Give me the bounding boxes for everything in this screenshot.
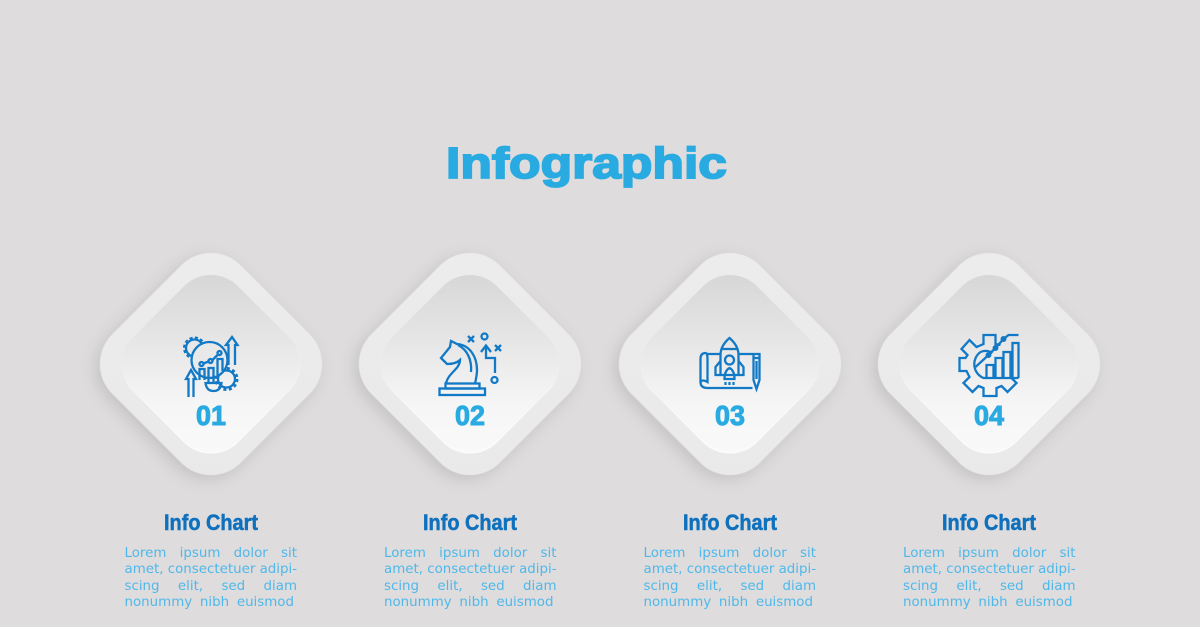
text block: Lorem ipsum dolor sit bbox=[384, 546, 556, 561]
panel: step 02 bbox=[352, 253, 581, 610]
outer diamond bbox=[861, 236, 1117, 492]
title: Infographic bbox=[446, 139, 727, 188]
heading: Info Chart bbox=[682, 510, 777, 535]
text block bbox=[124, 546, 297, 610]
text block: Lorem ipsum dolor sit bbox=[124, 546, 297, 561]
heading: Info Chart bbox=[164, 510, 258, 535]
text block: scing elit, sed diam bbox=[903, 579, 1076, 594]
panel: step 03 bbox=[612, 253, 841, 610]
icon: chess knight strategy bbox=[440, 334, 501, 395]
text block: amet, consectetuer adipi- bbox=[903, 562, 1076, 577]
icon: rocket blueprint bbox=[700, 338, 759, 389]
outer diamond bbox=[342, 236, 598, 492]
inner diamond bbox=[884, 259, 1094, 469]
text block: nonummy nibh euismod bbox=[384, 595, 554, 610]
icon: gear with rising bars bbox=[960, 335, 1018, 396]
outer diamond bbox=[601, 236, 858, 492]
outer diamond bbox=[82, 236, 339, 492]
inner diamond bbox=[625, 259, 834, 469]
text block: amet, consectetuer adipi- bbox=[124, 562, 297, 577]
number 04: 04 bbox=[974, 400, 1004, 431]
text block bbox=[644, 546, 816, 610]
number 02: 02 bbox=[455, 400, 485, 431]
text block: scing elit, sed diam bbox=[644, 579, 816, 594]
text block: nonummy nibh euismod bbox=[124, 595, 294, 610]
icon: gears and growth chart bbox=[184, 337, 237, 397]
heading: Info Chart bbox=[423, 510, 518, 535]
text block: nonummy nibh euismod bbox=[903, 595, 1072, 610]
text block: scing elit, sed diam bbox=[384, 579, 556, 594]
text block: Lorem ipsum dolor sit bbox=[903, 546, 1076, 561]
inner diamond bbox=[106, 259, 315, 469]
heading: Info Chart bbox=[942, 510, 1037, 535]
text block: Lorem ipsum dolor sit bbox=[644, 546, 816, 561]
text block: scing elit, sed diam bbox=[124, 579, 297, 594]
number 03: 03 bbox=[714, 400, 744, 431]
text block bbox=[384, 546, 557, 610]
panel: step 04 bbox=[871, 253, 1100, 610]
inner diamond bbox=[365, 259, 575, 469]
text block: amet, consectetuer adipi- bbox=[384, 562, 557, 577]
number 01: 01 bbox=[196, 400, 226, 431]
text block: amet, consectetuer adipi- bbox=[644, 562, 816, 577]
text block: nonummy nibh euismod bbox=[644, 595, 813, 610]
panel: step 01 bbox=[93, 253, 322, 610]
text block bbox=[903, 546, 1076, 610]
